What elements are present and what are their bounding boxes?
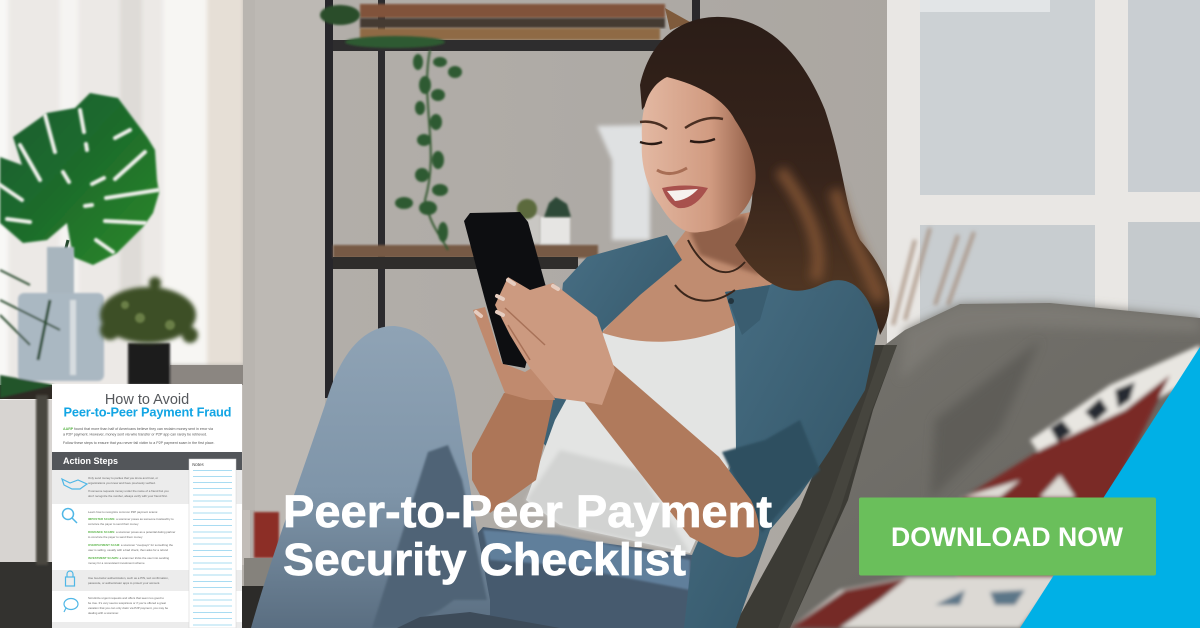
step text: INVESTMENT SCAMS: a scammer tricks the user into sending — [88, 556, 170, 560]
step text: dealing with a scammer. — [88, 611, 119, 615]
download button — [859, 498, 1156, 576]
step text: money for a nonexistent investment scheme — [88, 561, 145, 565]
document intro text: Follow these steps to ensure that you never fall victim to a P2P payment scam in the first place. — [63, 441, 215, 445]
sofa — [733, 303, 1200, 628]
action steps bar: Action Steps — [63, 456, 118, 466]
blue corner triangle — [1020, 347, 1200, 628]
icon: speech bubble — [64, 598, 78, 612]
step text — [88, 476, 175, 615]
step text: organizations you know and have previously verified. — [88, 481, 156, 485]
patterned pillow — [790, 345, 1200, 628]
tank top — [526, 325, 736, 553]
step text: convince the payer to send their money — [88, 522, 139, 526]
shirt left panel — [540, 235, 682, 455]
glass vase — [0, 247, 104, 398]
shelving unit — [325, 0, 700, 398]
woman — [251, 17, 890, 628]
step text: Scrutinize urgent requests and offers that seem too good to — [88, 596, 164, 600]
forearm — [583, 363, 759, 557]
document heading: Peer-to-Peer Payment Fraud — [64, 404, 232, 420]
title: Security Checklist — [283, 534, 686, 585]
notes panel — [189, 459, 236, 628]
icon: handshake — [62, 479, 87, 489]
icon: padlock — [66, 571, 74, 586]
download button: DOWNLOAD NOW — [891, 522, 1123, 552]
potted plant — [100, 277, 198, 385]
document intro text: AARP found that more than half of Americans believe they can reclaim money sent in error via — [63, 427, 213, 431]
phone — [464, 212, 546, 368]
shirt right panel — [684, 262, 880, 628]
document heading: How to Avoid — [105, 392, 189, 408]
step text: to convince the payer to send them money — [88, 535, 143, 539]
step text: IMPOSTER SCAMS: a scammer poses as someone trustworthy to — [88, 517, 174, 521]
hair — [640, 17, 890, 335]
step text: Only send money to parties that you know and trust, or — [88, 476, 158, 480]
face details — [640, 118, 723, 208]
window frame — [887, 0, 1200, 345]
right hand — [476, 277, 615, 405]
step text: be true. It's very seems suspicious or if you're offered a great — [88, 601, 166, 605]
step text: If someone requests money under the name of a friend but you — [88, 489, 169, 493]
step text: Learn how to recognize common P2P payment scams: — [88, 510, 158, 514]
document intro text: a P2P payment. However, money sent via wire transfer or P2P app can rarely be retrieved. — [63, 432, 207, 436]
action steps bar — [52, 452, 242, 470]
document preview — [52, 384, 242, 628]
step text: OVERPAYMENT SCAM: a scammer "overpays" for something the — [88, 543, 173, 547]
document intro text — [63, 427, 215, 445]
left forearm — [472, 393, 554, 513]
title: Peer-to-Peer Payment — [283, 486, 772, 537]
document heading — [64, 392, 232, 420]
notes panel: Notes — [192, 462, 205, 467]
face — [642, 77, 756, 233]
step text: Use two-factor authentication, such as a PIN, text confirmation, — [88, 576, 169, 580]
step text: user is selling, usually with a bad check, then asks for a refund — [88, 548, 168, 552]
step text: don't recognize the number, always verify with your friend first. — [88, 494, 168, 498]
step rows — [52, 470, 242, 628]
title — [283, 486, 772, 585]
raised leg jeans — [251, 326, 692, 628]
icon: magnifier — [62, 508, 77, 523]
left hand — [473, 307, 555, 400]
step text: passcode, or authenticator apps to protect your account. — [88, 581, 160, 585]
step text: vacation that you can only claim via P2P payment, you may be — [88, 606, 169, 610]
hanging vine — [320, 5, 462, 250]
step text: ROMANCE SCAMS: a scammer poses as a potential dating partner — [88, 530, 175, 534]
plant: monstera leaf — [0, 93, 159, 360]
neck and chest — [600, 210, 790, 345]
